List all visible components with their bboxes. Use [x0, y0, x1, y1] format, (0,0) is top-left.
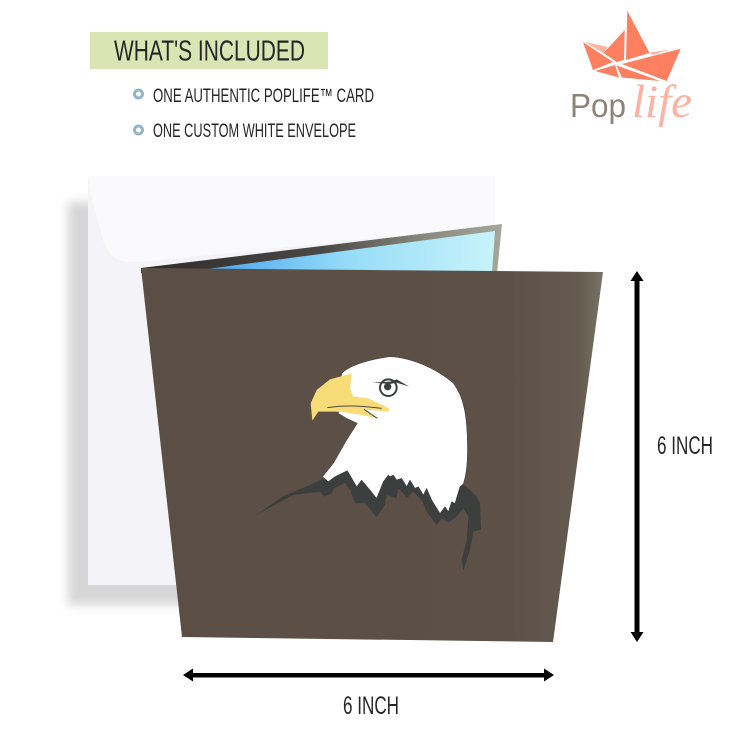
list item: envelope: ONE CUSTOM WHITE ENVELOPE — [153, 121, 356, 142]
envelope body — [88, 176, 495, 585]
arrow: height — [630, 271, 644, 642]
heading: what's included: WHAT'S INCLUDED — [114, 36, 305, 68]
label: width 6 inch: 6 INCH — [343, 692, 399, 720]
icon: origami boat — [583, 11, 681, 81]
beak line — [327, 406, 382, 418]
card back edge — [141, 224, 502, 273]
list item: envelope — [134, 121, 356, 142]
logo wordmark: life: life — [632, 76, 692, 128]
envelope — [88, 176, 495, 585]
card inside: blue — [203, 231, 495, 273]
card back panel — [141, 224, 502, 273]
logo wordmark: pop: Pop — [570, 87, 626, 124]
envelope shadow — [68, 202, 268, 605]
logo: poplife — [570, 11, 692, 128]
eagle eye — [373, 379, 409, 396]
eagle illustration — [255, 357, 481, 571]
heading: what's included — [90, 32, 328, 69]
eagle beak — [311, 373, 389, 421]
envelope flap — [88, 176, 495, 262]
eagle dark feathers — [255, 471, 481, 571]
arrow: width — [183, 668, 554, 682]
eagle white head — [323, 357, 467, 513]
label: height 6 inch: 6 INCH — [657, 432, 713, 460]
list item: card: ONE AUTHENTIC POPLIFE™ CARD — [153, 86, 374, 107]
list item: card — [134, 86, 374, 107]
list: included items — [134, 86, 374, 142]
card front — [141, 268, 603, 642]
